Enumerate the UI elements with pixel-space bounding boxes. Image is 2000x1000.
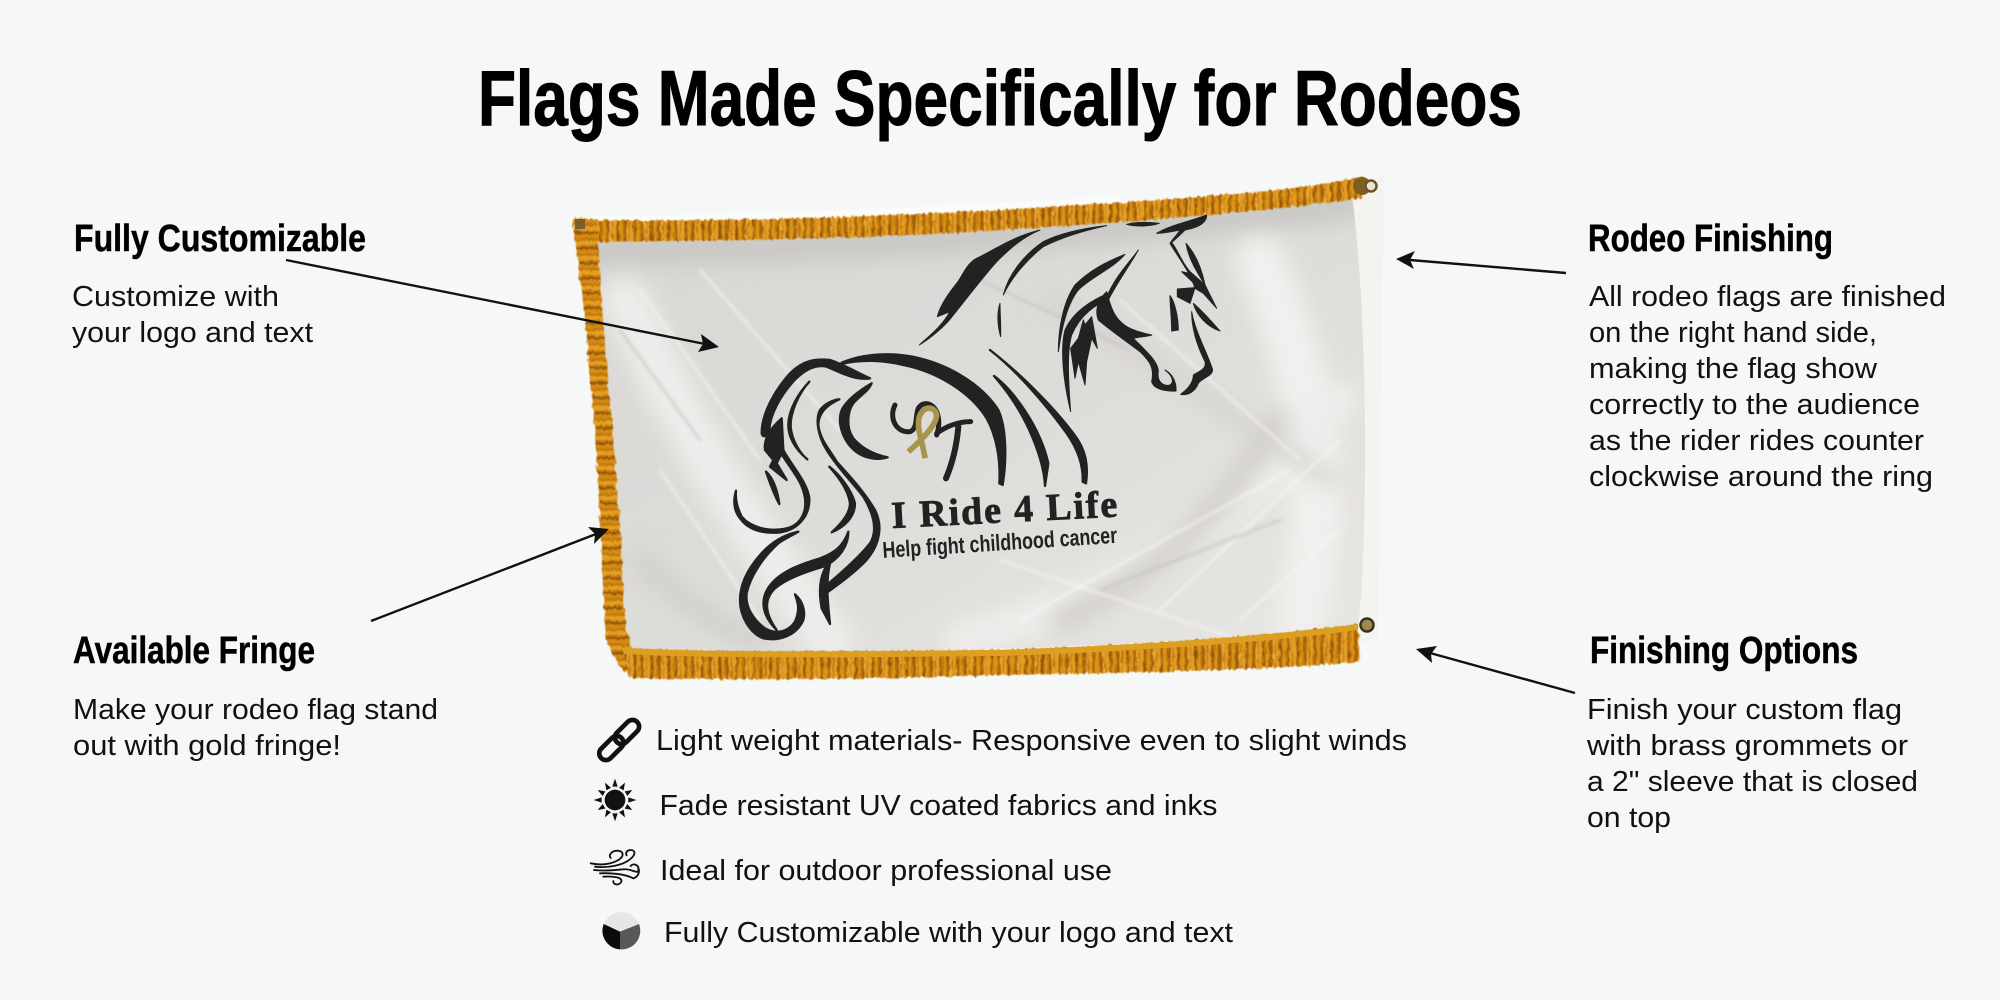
panel: fully customizable: Customize with [72, 281, 279, 313]
title: Flags Made Specifically for Rodeos [478, 54, 1522, 142]
panel: available fringe [73, 630, 438, 762]
top fringe [575, 176, 1364, 242]
panel: available fringe: out with gold fringe! [73, 730, 341, 762]
arrow: fringe [371, 527, 609, 621]
top-left corner tab [575, 219, 585, 229]
flag logo text: Help fight childhood cancer [882, 522, 1118, 563]
cloth folds [600, 205, 1350, 640]
icon: chain link [596, 717, 642, 763]
icon: shaded cube circle [602, 912, 640, 949]
SPT monogram [893, 404, 971, 478]
panel: available fringe: Available Fringe [73, 630, 315, 672]
panel: rodeo finishing [1588, 218, 1946, 493]
list item: ideal for outdoor: Ideal for outdoor professional use [660, 855, 1112, 887]
flag cloth [590, 190, 1369, 652]
panel: rodeo finishing: clockwise around the ring [1589, 461, 1933, 493]
flag [573, 174, 1384, 679]
panel: rodeo finishing: correctly to the audience [1589, 389, 1920, 421]
panel: rodeo finishing: making the flag show [1589, 353, 1878, 385]
top grommet [1353, 177, 1376, 195]
panel: rodeo finishing: as the rider rides counter [1589, 425, 1924, 457]
panel: finishing options: a 2" sleeve that is closed [1587, 766, 1918, 798]
arrow: rodeo finishing [1396, 251, 1566, 273]
arrow: finishing options [1416, 646, 1575, 693]
right sleeve [1352, 174, 1384, 642]
arrow: customizable to flag [286, 260, 719, 352]
flag logo text: I Ride 4 Life [890, 484, 1118, 537]
list item: light weight: Light weight materials- Responsive even to slight winds [656, 725, 1407, 757]
icon: sun [594, 779, 636, 821]
panel: finishing options: Finish your custom flag [1587, 694, 1902, 726]
bottom fringe [622, 624, 1360, 679]
bottom fringe header [622, 624, 1358, 657]
panel: finishing options: Finishing Options [1590, 630, 1858, 672]
panel: available fringe: Make your rodeo flag stand [73, 694, 438, 726]
top hem strip [596, 196, 1120, 224]
panel: fully customizable: Fully Customizable [74, 218, 366, 260]
panel: rodeo finishing: Rodeo Finishing [1588, 218, 1833, 260]
bottom grommet [1360, 618, 1374, 632]
panel: finishing options: on top [1587, 802, 1671, 834]
flag logo text [882, 484, 1118, 563]
horse rump and tail artwork [734, 350, 1087, 639]
list item: fade resistant: Fade resistant UV coated fabrics and inks [660, 790, 1218, 822]
panel: finishing options: with brass grommets or [1586, 730, 1908, 762]
icon: wind [591, 850, 639, 884]
gold ribbon [908, 408, 937, 458]
panel: fully customizable [72, 218, 366, 349]
panel: rodeo finishing: on the right hand side, [1589, 317, 1877, 349]
panel: rodeo finishing: All rodeo flags are finished [1589, 281, 1946, 313]
list item: fully customizable: Fully Customizable with your logo and text [664, 917, 1233, 949]
horse head artwork [919, 215, 1220, 412]
panel: fully customizable: your logo and text [72, 317, 313, 349]
panel: finishing options [1586, 630, 1918, 834]
left fringe [573, 220, 632, 678]
